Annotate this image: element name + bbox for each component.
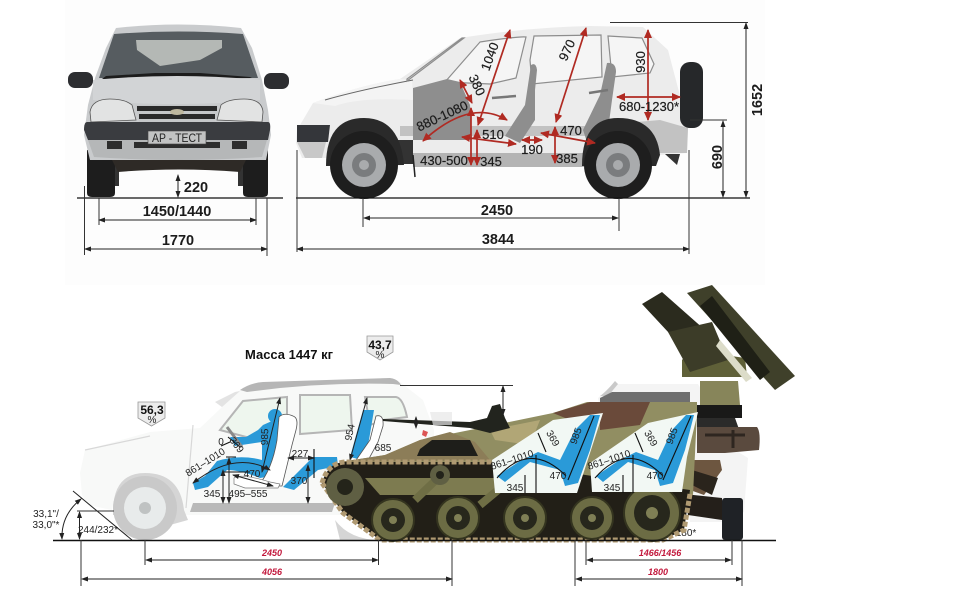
seats <box>413 63 616 145</box>
badge: rear axle 43,7% <box>367 336 393 361</box>
side view red interior dimensions: 680-1230* <box>619 99 679 114</box>
side view red interior dimensions: 345 <box>480 154 502 169</box>
side view red interior dimensions: 880-1080 <box>414 98 470 134</box>
side view red interior dimensions: 430-500 <box>420 153 468 168</box>
front view dimensions: 220 <box>184 180 208 196</box>
blue passenger figures in bottom car: 369 <box>226 435 246 456</box>
blue passenger figures in bottom car: 345 <box>204 489 221 500</box>
approach angle: 33,1"/ <box>33 509 59 520</box>
gun turret <box>383 404 510 433</box>
side view dimensions: 690 <box>710 145 726 169</box>
side view red interior dimensions: 385 <box>556 151 578 166</box>
side view dimensions: 2450 <box>481 203 513 219</box>
side view car <box>296 26 703 199</box>
side view red interior dimensions: 510 <box>482 127 504 142</box>
blue passenger figures in bottom car: 227 <box>292 449 309 460</box>
badge: front axle 56,3%: 56,3 <box>140 403 164 417</box>
side view red interior dimensions: 380 <box>466 72 488 98</box>
seat cutout panel 1: 861–1010 <box>489 448 535 473</box>
badge: rear axle 43,7%: 43,7 <box>368 338 392 352</box>
licence plate text: АР - ТЕСТ <box>152 133 202 145</box>
bottom dimensions: 4056 <box>261 567 283 577</box>
blue passenger figures in bottom car: 685 <box>375 443 392 454</box>
blue passenger figures in bottom car: 985 <box>260 428 271 445</box>
top ground line <box>77 197 750 199</box>
seat cutout panel 1 <box>489 413 603 494</box>
badge: front axle 56,3% <box>138 402 165 426</box>
front view dimensions: 1450/1440 <box>143 204 211 220</box>
seat cutout panel 2: 369 <box>641 429 659 449</box>
tank hull <box>340 402 697 495</box>
blue passenger figures in bottom car: 861–1010 <box>184 446 228 479</box>
side view red interior dimensions: 970 <box>556 37 578 63</box>
bottom car side view <box>80 378 434 540</box>
seat cutout panel 1: 345 <box>507 483 524 494</box>
tank tracks and wheels <box>322 462 690 541</box>
blue passenger figures in bottom car <box>184 398 392 503</box>
front view car <box>68 24 289 197</box>
bottom dimensions <box>81 386 742 586</box>
blue passenger figures in bottom car: 470 <box>244 469 261 480</box>
approach angle: 244/232* <box>78 525 118 536</box>
approach angle: 33,0"* <box>33 520 60 531</box>
front view dimensions <box>84 175 267 256</box>
side view red interior dimensions: 190 <box>521 142 543 157</box>
wheels <box>326 118 660 199</box>
rear vehicle behind tank <box>598 381 748 540</box>
seat cutout panel 2: 470 <box>647 471 664 482</box>
windows <box>407 35 654 84</box>
seat cutout panel 1: 369 <box>543 429 561 449</box>
side view red interior dimensions <box>414 28 680 169</box>
blue passenger figures in bottom car: 370 <box>291 476 308 487</box>
seat cutout panel 2: 345 <box>604 483 621 494</box>
seat cutout panel 2: 861–1010 <box>586 448 632 473</box>
seat cutout panel 2: 985 <box>665 426 681 446</box>
missile launcher <box>642 285 795 453</box>
bottom dimensions: 1800 <box>648 567 668 577</box>
side view dimensions: 1652 <box>750 84 766 116</box>
weight title: Масса 1447 кг <box>245 347 334 362</box>
blue passenger figures in bottom car: 0 <box>218 437 224 448</box>
seat cutout panel 1: 985 <box>569 426 585 446</box>
side view dimensions: 3844 <box>482 232 514 248</box>
side view red interior dimensions: 1040 <box>478 40 502 73</box>
blue passenger figures in bottom car: 495–555 <box>229 489 268 500</box>
side view red interior dimensions: 930 <box>633 51 648 73</box>
bottom dimensions: 1466/1456 <box>639 548 682 558</box>
front view dimensions: 1770 <box>162 233 194 249</box>
text 180: 180* <box>676 528 696 539</box>
side view dimensions <box>297 22 766 254</box>
badge: rear axle 43,7%: % <box>376 350 385 361</box>
seat cutout panel 1: 470 <box>550 471 567 482</box>
bottom ground line <box>53 540 776 542</box>
spare wheel <box>680 62 703 128</box>
bottom dimensions: 2450 <box>261 548 282 558</box>
seat cutout panel 2 <box>586 412 698 494</box>
blue passenger figures in bottom car: 954 <box>343 423 358 442</box>
mirrors <box>68 72 289 89</box>
approach angle <box>33 491 132 540</box>
side view red interior dimensions: 470 <box>560 123 582 138</box>
badge: front axle 56,3%: % <box>148 415 157 426</box>
